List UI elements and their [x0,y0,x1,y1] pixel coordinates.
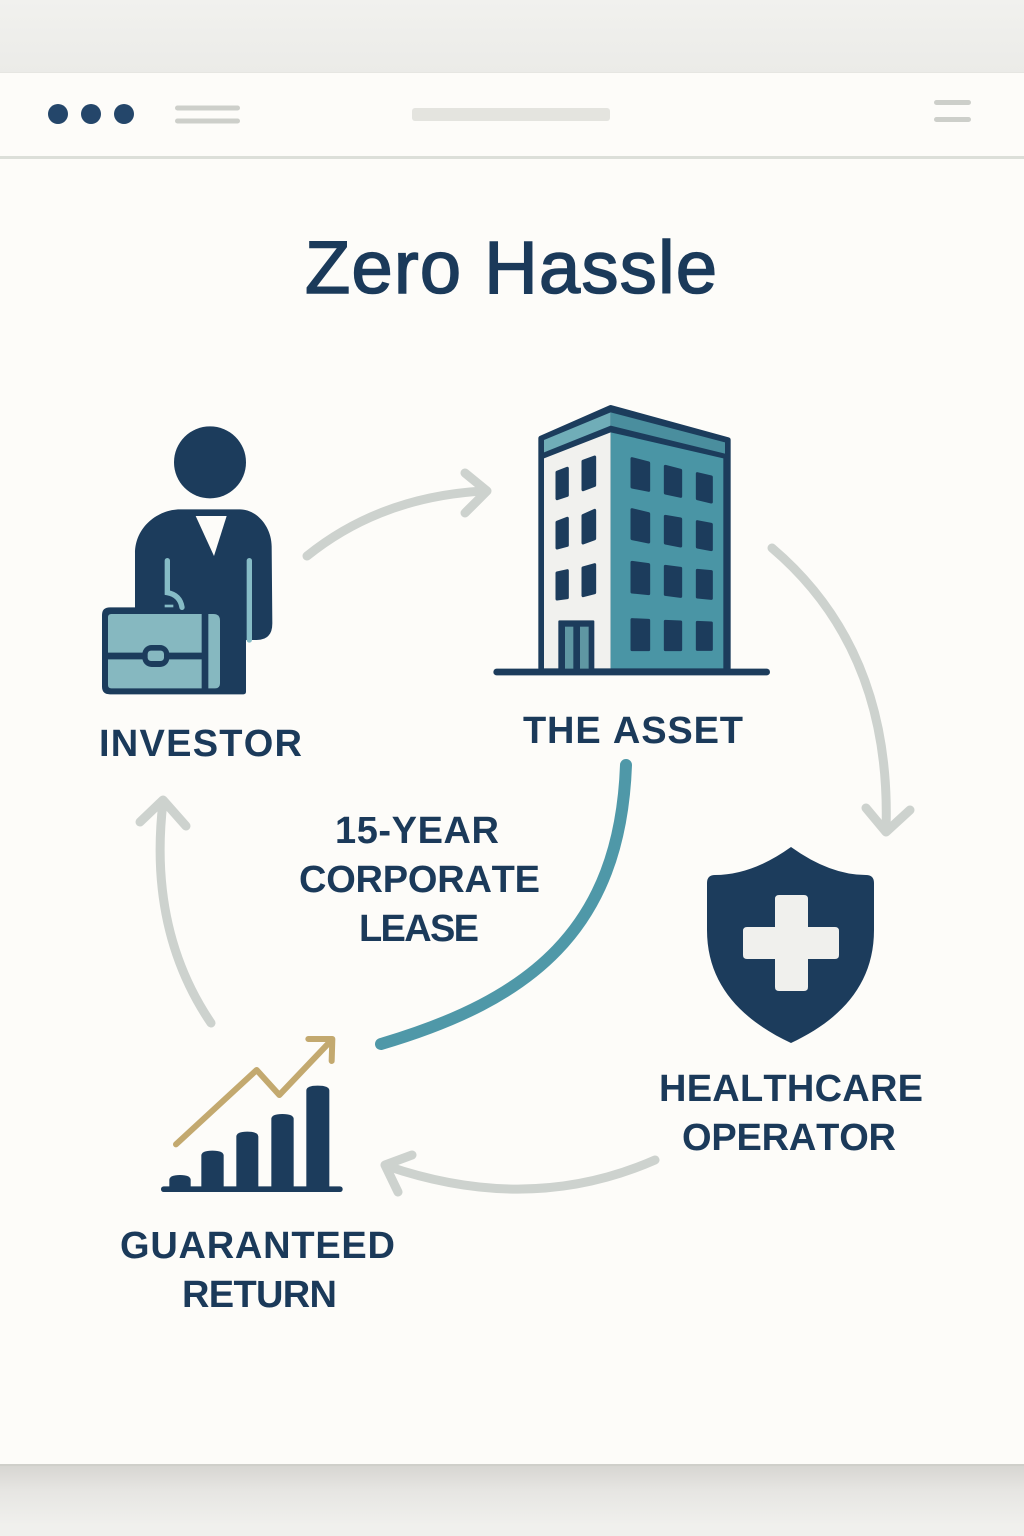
lease arrow [381,765,626,1044]
label: guaranteed return: GUARANTEED [120,1225,395,1267]
label: investor: INVESTOR [99,723,302,765]
label: healthcare operator: HEALTHCARE [659,1068,923,1110]
label: 15-year corporate lease [299,810,540,950]
label: 15-year corporate lease: 15-YEAR [335,810,499,852]
label: guaranteed return: RETURN [182,1274,337,1316]
icon: building [493,408,770,675]
arrow: investor to asset [307,473,487,556]
label: healthcare operator [659,1068,923,1159]
label: 15-year corporate lease: CORPORATE [299,859,540,901]
icon: shield with cross [707,847,874,1043]
title: Zero Hassle [305,226,717,309]
arrow: operator to return [385,1155,655,1192]
icon: investor with briefcase [102,426,272,694]
label: guaranteed return [120,1225,395,1316]
label: the asset: THE ASSET [523,710,743,752]
arrow: asset to operator [772,548,910,832]
browser header bar [0,100,1024,159]
label: 15-year corporate lease: LEASE [359,908,479,950]
arrow: return to investor [140,800,211,1023]
label: healthcare operator: OPERATOR [682,1117,896,1159]
icon: growth chart [161,1039,343,1192]
